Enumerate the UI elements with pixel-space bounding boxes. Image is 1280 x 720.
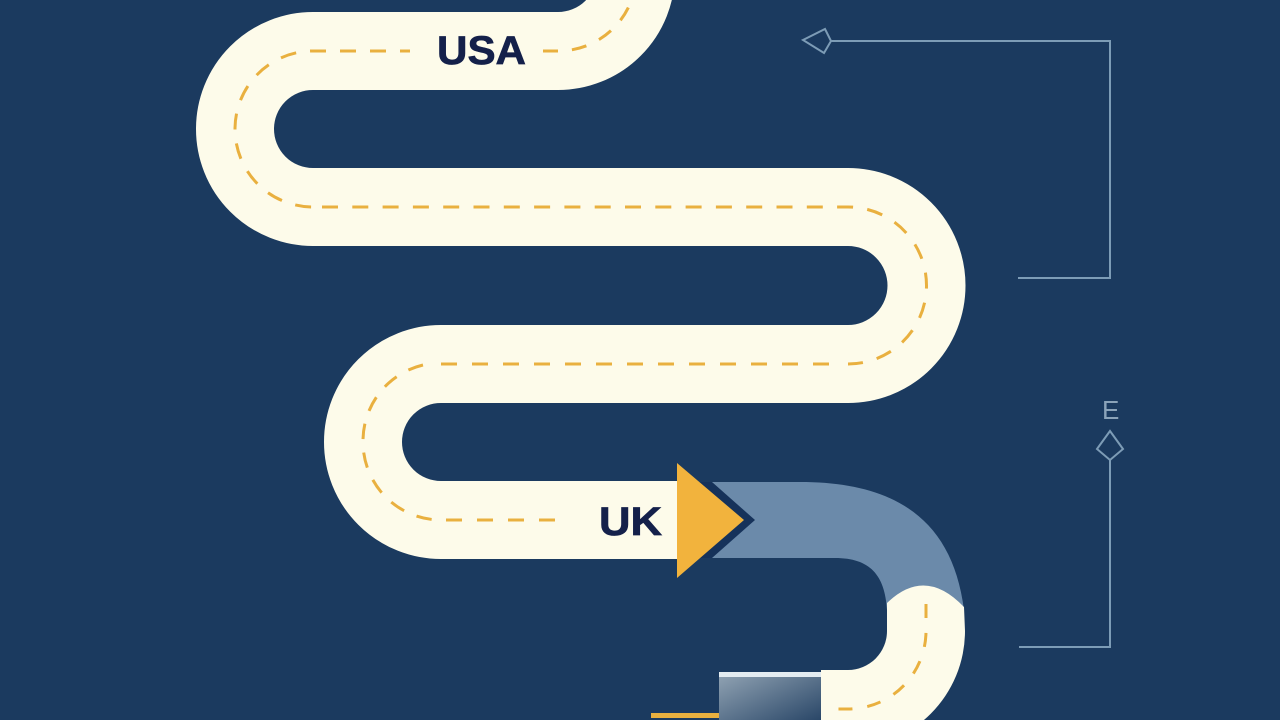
road: lower cream section [821, 585, 965, 720]
road centre dashes: third row [441, 362, 829, 366]
road: faded blue section after UK [700, 482, 964, 610]
arrow: UK marker [677, 463, 755, 578]
label: USA: USA [437, 29, 526, 73]
road centre dashes: row before UK [446, 518, 555, 522]
label: UK: UK [599, 500, 662, 544]
road centre dashes: after USA [543, 4, 630, 51]
road: main winding cream path [235, 0, 926, 520]
label: E: E [1102, 395, 1119, 425]
connector: lower bracket with diamond head [1019, 431, 1123, 647]
road centre dashes: lower section [832, 604, 926, 709]
road centre dashes: second row and right bend [322, 207, 926, 364]
icon: grey box at bottom [651, 672, 821, 720]
road centre dashes: lower left bend [363, 365, 441, 520]
road centre dashes: top row and left bend [235, 51, 410, 207]
connector: upper bracket with kite arrowhead [803, 29, 1110, 278]
